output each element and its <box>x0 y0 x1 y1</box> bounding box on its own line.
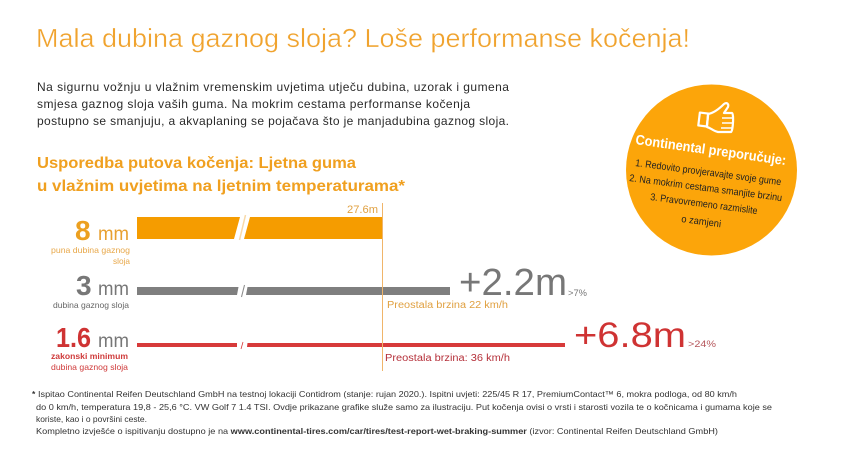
footnote: * <box>32 389 36 399</box>
chart heading: Usporedba putova kočenja: Ljetna guma <box>37 155 356 172</box>
number: 8: 8 <box>75 215 91 246</box>
intro text block: Na sigurnu vožnju u vlažnim vremenskim uvjetima utječu dubina, uzorak i gumena <box>37 80 509 94</box>
intro text block: postupno se smanjuju, a akvaplaning se pojačava što je manjadubina gaznog sloja. <box>37 114 509 128</box>
label: 27.6m: 27.6m <box>347 204 378 216</box>
badge list: 1. Redovito provjeravajte svoje gume <box>635 158 782 188</box>
bar: 3 mm <box>137 287 450 295</box>
footnote <box>32 389 772 436</box>
value: +2.2m: +2.2m <box>459 262 567 304</box>
intro text block <box>37 80 509 128</box>
label: remaining speed 36: Preostala brzina: 36 km/h <box>385 353 510 364</box>
footnote: koriste, kao i o površini ceste. <box>36 414 147 424</box>
badge list: 2. Na mokrim cestama smanjite brzinu <box>629 173 783 204</box>
caption: 8 mm: sloja <box>113 256 130 266</box>
caption: 1.6 mm: zakonski minimum <box>51 351 128 361</box>
value: >24%: >24% <box>688 339 717 350</box>
badge list: o zamjeni <box>681 214 722 230</box>
badge: Continental recommends <box>626 84 797 256</box>
footnote: Ispitao Continental Reifen Deutschland GmbH na testnoj lokaciji Contidrom (stanje: rujan 2020.). Ispitni uvjeti: 225/45 R 17, PremiumContact™ 6, mokra podloga, od 80 km/h <box>38 389 737 399</box>
slash mark <box>240 215 246 240</box>
caption: 3 mm: dubina gaznog sloja <box>53 300 129 310</box>
footnote: Kompletno izvješće o ispitivanju dostupno je na www.continental-tires.com/car/tires/test-report-wet-braking-summer (izvor: Continental Reifen Deutschland GmbH) <box>36 426 718 436</box>
value: >7%: >7% <box>568 288 588 299</box>
label: mm: mm <box>98 331 129 352</box>
title: Mala dubina gaznog sloja? Loše performanse kočenja! <box>36 23 690 53</box>
number: 3: 3 <box>76 270 92 301</box>
caption: 1.6 mm: dubina gaznog sloja <box>51 362 128 372</box>
badge heading: Continental preporučuje: <box>635 131 787 168</box>
number: 1.6: 1.6 <box>56 322 91 353</box>
label: 8 mm: mm <box>98 224 129 245</box>
value: +6.8m: +6.8m <box>574 316 686 355</box>
chart: braking distances <box>51 203 717 372</box>
row: 1.6 mm <box>51 316 717 372</box>
bar: 1.6 mm <box>137 343 565 347</box>
footnote: do 0 km/h, temperatura 19,8 - 25,6 °C. VW Golf 7 1.4 TSI. Ovdje prikazane grafike služe samo za ilustraciju. Put kočenja ovisi o vrsti i starosti vozila te o kočnicama i gumama koje se <box>36 402 772 412</box>
row: 8 mm <box>51 204 382 266</box>
chart heading <box>37 155 406 195</box>
slash mark <box>242 285 244 297</box>
label: remaining speed 22: Preostala brzina 22 km/h <box>387 300 508 311</box>
intro text block: smjesa gaznog sloja vaših guma. Na mokrim cestama performanse kočenja <box>37 97 470 111</box>
caption: 1.6 mm <box>51 351 128 372</box>
caption: 8 mm <box>51 245 130 266</box>
caption: 8 mm: puna dubina gaznog <box>51 245 130 255</box>
label: mm: mm <box>98 279 129 300</box>
chart heading: u vlažnim uvjetima na ljetnim temperaturama* <box>37 178 406 195</box>
badge list <box>629 158 783 230</box>
reference line <box>382 203 384 371</box>
bar: 8 mm <box>137 217 382 239</box>
badge list: 3. Pravovremeno razmislite <box>650 192 759 217</box>
badge circle <box>626 84 797 256</box>
row: 3 mm <box>53 262 588 311</box>
slash mark <box>241 342 243 349</box>
icon: thumbs up <box>698 103 733 132</box>
